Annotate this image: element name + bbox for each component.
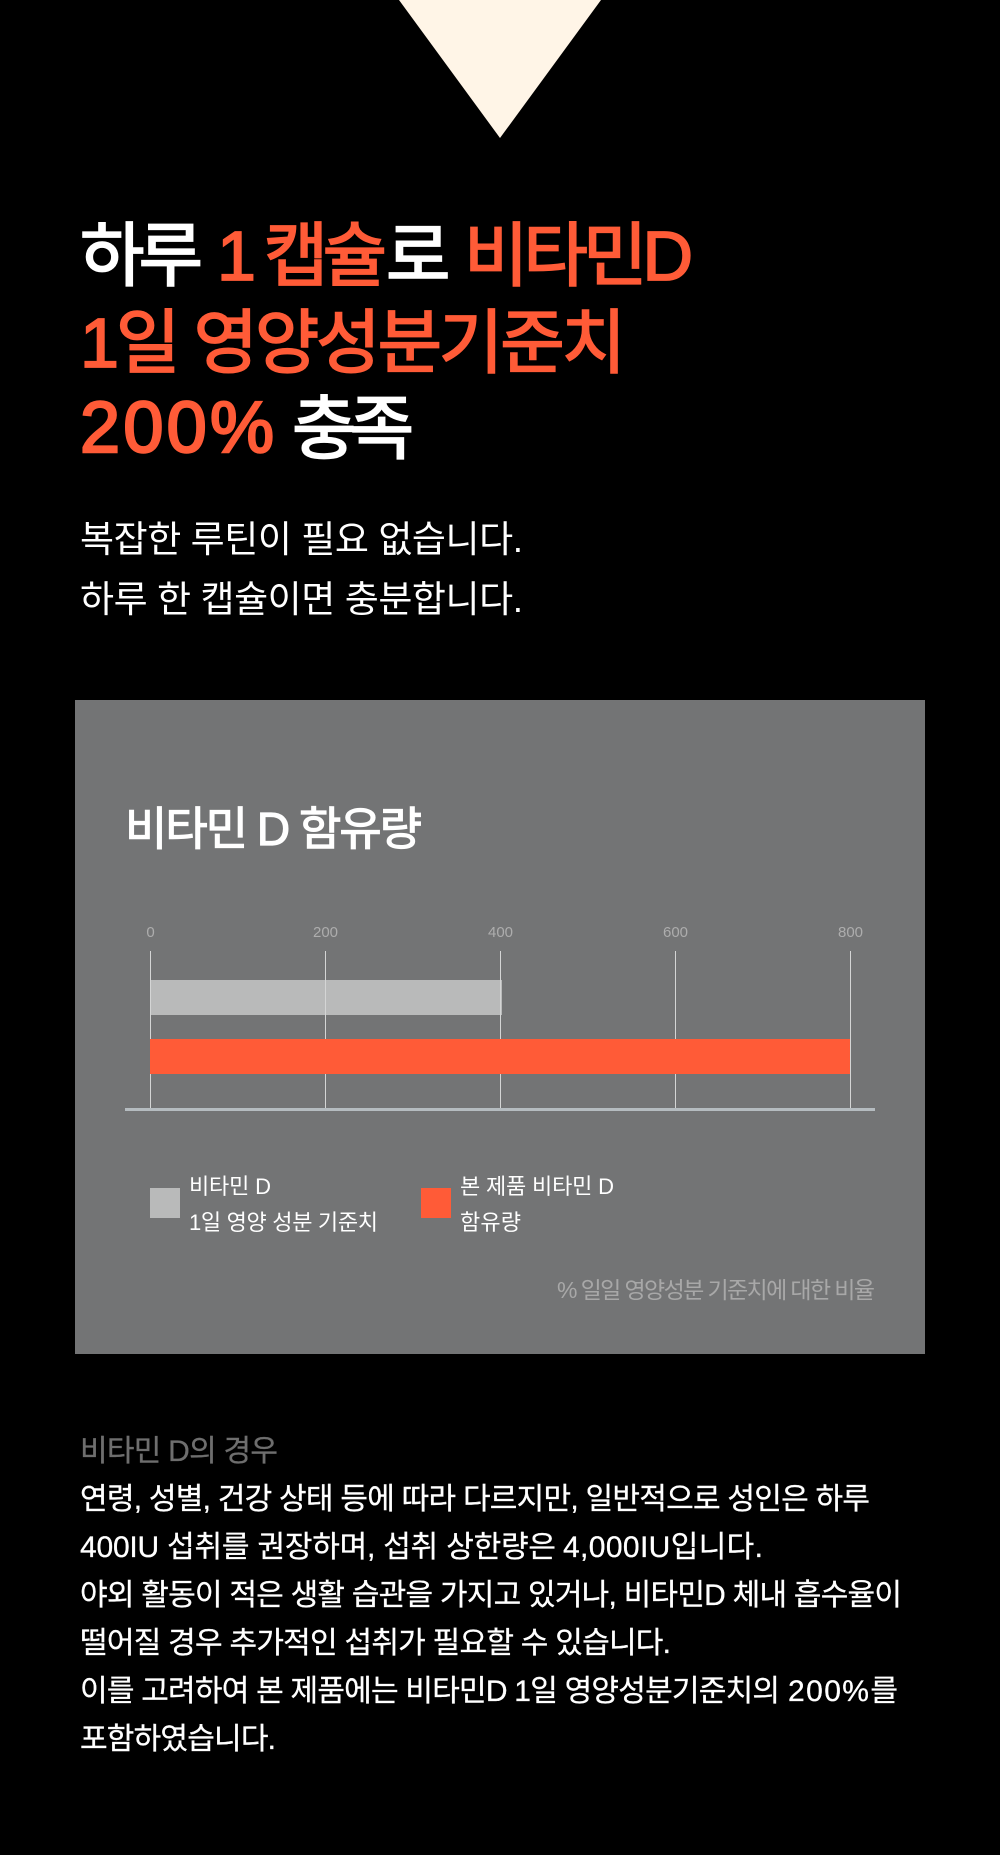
title: 1일 영양성분기준치 — [80, 304, 626, 382]
text block: vitamin D explanation: 400IU 섭취를 권장하며, 섭취 상한량은 — [80, 1531, 556, 1564]
text block: vitamin D explanation — [80, 1435, 902, 1756]
axis labels: 200 — [313, 924, 338, 941]
subtitle — [80, 519, 523, 620]
axis labels — [146, 924, 863, 941]
subtitle: 하루 한 캡슐이면 충분합니다. — [80, 579, 523, 620]
legend: daily reference: 비타민 D — [189, 1174, 271, 1199]
panel heading: 비타민 D 함유량 — [125, 803, 422, 855]
legend: daily reference — [150, 1174, 378, 1235]
text block: vitamin D explanation: 떨어질 경우 추가적인 섭취가 필요할 수 있습니다. — [80, 1627, 671, 1660]
text block: vitamin D explanation: 포함하였습니다. — [80, 1723, 276, 1756]
panel: vitamin D content chart — [75, 700, 925, 1354]
axis labels: 600 — [663, 924, 688, 941]
axis labels: 800 — [838, 924, 863, 941]
title: 비타민D — [464, 217, 693, 295]
title: 200% — [80, 388, 274, 468]
legend: product content: 본 제품 비타민 D — [460, 1174, 614, 1199]
title: 로 — [386, 217, 450, 295]
icon: downward triangle — [399, 0, 601, 138]
text block: vitamin D explanation: 연령, 성별, 건강 상태 등에 따라 다르지만, 일반적으로 성인은 하루 — [80, 1483, 870, 1516]
subtitle: 복잡한 루틴이 필요 없습니다. — [80, 519, 523, 560]
title: 1 캡슐 — [217, 217, 387, 295]
title: 충족 — [292, 390, 414, 468]
legend: product content: 함유량 — [460, 1210, 521, 1235]
text block: vitamin D explanation: 이를 고려하여 본 제품에는 비타민D 1일 영양성분기준치의 — [80, 1675, 780, 1708]
text block: vitamin D explanation: 비타민 D의 경우 — [80, 1435, 278, 1468]
text block: vitamin D explanation: 4,000IU입니다. — [563, 1531, 763, 1564]
chart note: % 일일 영양성분 기준치에 대한 비율 — [557, 1277, 875, 1303]
legend: daily reference: 1일 영양 성분 기준치 — [189, 1210, 378, 1235]
title: 하루 — [80, 217, 203, 295]
text block: vitamin D explanation: 야외 활동이 적은 생활 습관을 가지고 있거나, 비타민D 체내 흡수율이 — [80, 1579, 902, 1612]
text block: vitamin D explanation: 200%를 — [788, 1675, 898, 1708]
axis labels: 0 — [146, 924, 155, 941]
axis labels: 400 — [488, 924, 513, 941]
legend: product content — [421, 1174, 614, 1235]
bar chart — [125, 951, 875, 1111]
title — [80, 217, 693, 468]
